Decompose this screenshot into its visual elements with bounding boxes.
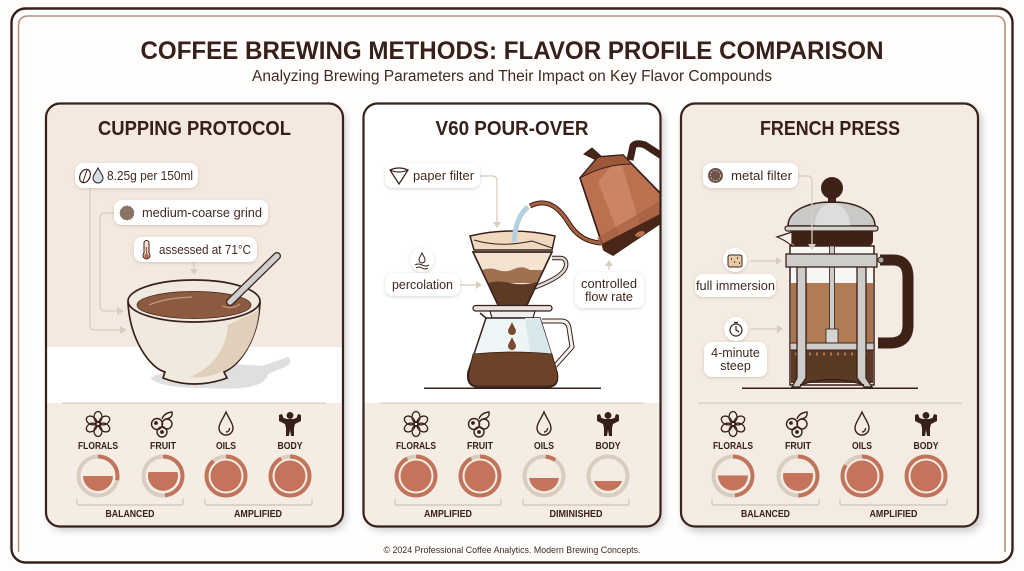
callout: controlled flow rate: controlled [581,277,637,291]
title: COFFEE BREWING METHODS: FLAVOR PROFILE COMPARISON [140,37,884,65]
oils [523,412,565,497]
florals [713,412,753,496]
verdict: balanced [712,499,819,520]
callout: paper filter: paper filter [413,169,474,183]
callout: percolation: percolation [392,278,453,292]
callout: grind [114,200,268,225]
verdict: diminished: DIMINISHED [550,508,603,520]
flavor row: cupping [77,412,312,520]
panel background [681,104,978,526]
connector arrows [750,176,816,333]
callout: 4-minute steep: 4-minute [711,346,760,360]
oils: OILS [534,440,554,452]
fruit: FRUIT [785,440,811,452]
icon: glass carafe [468,311,572,387]
body [906,412,946,496]
callout: grind: medium-coarse grind [142,206,262,220]
verdict: diminished [523,499,629,520]
body [270,412,310,496]
panel background [46,104,343,526]
panel: v60 pour-over [364,104,668,526]
florals [396,412,436,496]
callout: metal filter [703,163,798,188]
callout: ratio [75,163,198,188]
body [588,412,628,496]
panel: french press [681,104,978,526]
icon: v60 dripper [470,231,566,311]
verdict: amplified: AMPLIFIED [870,508,918,520]
verdict: balanced: BALANCED [741,508,790,520]
ground line [424,388,601,389]
florals [78,412,118,496]
florals: FLORALS [78,440,118,452]
fruit: FRUIT [150,440,176,452]
florals: FLORALS [396,440,436,452]
callout: full immersion [695,248,776,297]
callout: controlled flow rate [575,272,644,308]
fruit [778,412,818,496]
verdict: amplified [840,499,947,520]
body: BODY [914,440,938,452]
callout: percolation [385,248,460,296]
callout: temperature: assessed at 71°C [159,243,251,257]
icon: french press [777,177,908,387]
verdict: amplified [205,499,312,520]
ground line [742,388,918,389]
panel border [364,104,660,526]
verdict: amplified: AMPLIFIED [424,508,472,520]
body: BODY [278,440,302,452]
flavor row: v60 [395,412,629,520]
body: BODY [596,440,620,452]
connector arrows [90,188,198,334]
subtitle: Analyzing Brewing Parameters and Their Impact on Key Flavor Compounds [252,68,772,85]
callout: 4-minute steep [704,317,767,377]
oils: OILS [216,440,236,452]
water stream [514,207,528,242]
callout: ratio: 8.25g per 150ml [107,169,193,183]
oils [842,412,882,496]
heading: CUPPING PROTOCOL [98,118,291,140]
heading: V60 POUR-OVER [436,118,589,140]
icon: bowl with coffee and spoon [128,256,290,389]
callout: metal filter: metal filter [731,169,792,183]
heading: FRENCH PRESS [760,118,900,140]
callout: 4-minute steep: steep [720,359,751,373]
flavor row: french press [712,412,947,520]
callout: paper filter [385,163,480,188]
connector arrows [460,176,613,289]
panel background [364,104,660,526]
icon: copper gooseneck kettle [530,144,668,255]
fruit: FRUIT [467,440,493,452]
callout: full immersion: full immersion [696,279,775,293]
verdict: balanced: BALANCED [106,508,155,520]
footer: © 2024 Professional Coffee Analytics. Modern Brewing Concepts. [384,545,640,556]
oils [206,412,246,496]
fruit [144,412,182,496]
callout: temperature [134,237,257,262]
oils: OILS [852,440,872,452]
verdict: amplified [395,499,501,520]
callout: controlled flow rate: flow rate [585,290,633,304]
florals: FLORALS [713,440,753,452]
fruit [460,412,500,496]
verdict: amplified: AMPLIFIED [234,508,282,520]
verdict: balanced [77,499,183,520]
panel: cupping protocol [46,104,343,526]
